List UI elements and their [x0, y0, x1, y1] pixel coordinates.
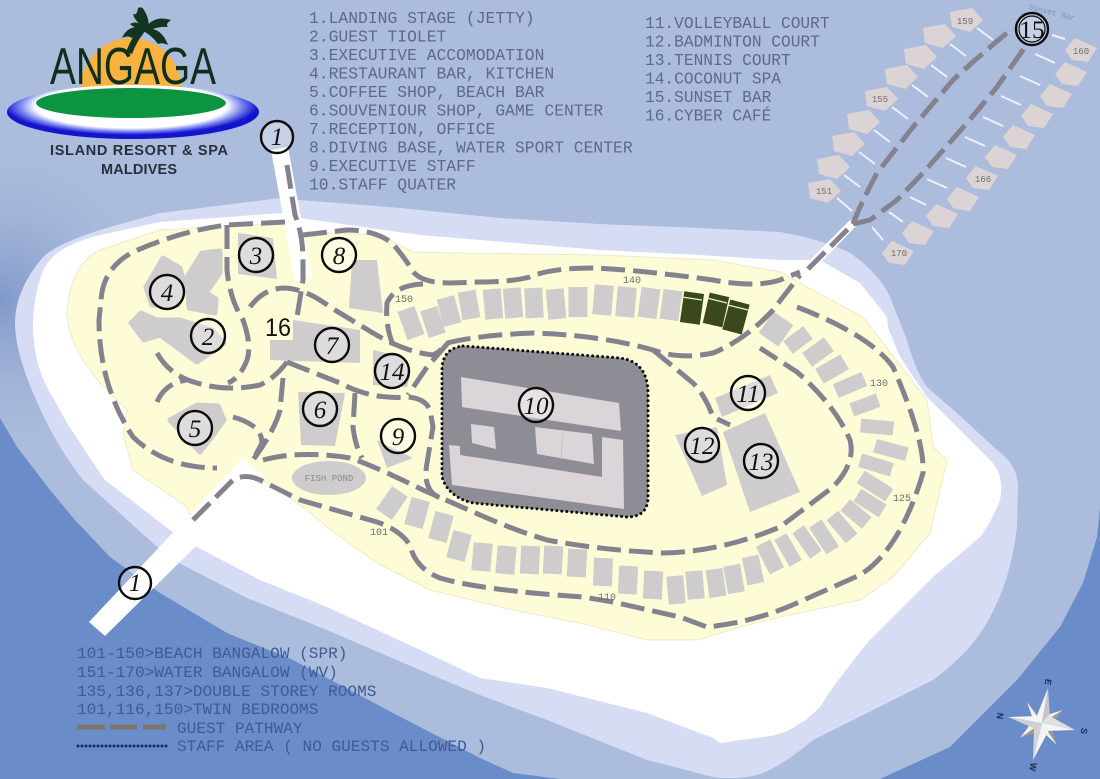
water villa numbers — [816, 17, 1089, 259]
legend: facilities 11-16 — [645, 15, 830, 126]
bangalow numbers: 125 — [893, 494, 911, 505]
volleyball court — [715, 375, 778, 417]
marker 9: 9 — [392, 424, 405, 451]
logo green island — [36, 88, 226, 118]
legend: facilities 11-16: 12.BADMINTON COURT — [645, 34, 820, 52]
marker 12: 12 — [690, 433, 714, 460]
marker 14 — [375, 354, 409, 388]
building: coffee shop — [170, 405, 224, 452]
marker 7 — [315, 328, 349, 362]
jetty to water villas — [803, 220, 856, 274]
marker 13: 13 — [748, 449, 774, 476]
bangalow numbers: 130 — [870, 379, 888, 390]
beach bangalows south row — [376, 486, 764, 605]
legend: facilities 11-16: 11.VOLLEYBALL COURT — [645, 15, 830, 33]
marker 12 — [685, 428, 719, 462]
water villa numbers: 160 — [1073, 47, 1089, 57]
legend: facilities 11-16: 14.COCONUT SPA — [645, 70, 781, 88]
legend: room types and line keys: 101-150>BEACH BANGALOW (SPR) — [77, 645, 347, 663]
marker 3 — [239, 238, 273, 272]
fish pond: FISH POND — [305, 474, 353, 484]
legend: facilities 1-10: 1.LANDING STAGE (JETTY) — [309, 9, 535, 28]
marker 11: 11 — [736, 381, 760, 408]
legend: room types and line keys: GUEST PATHWAY — [177, 720, 303, 738]
deep water lower right — [880, 507, 1100, 779]
legend: facilities 1-10 — [309, 9, 633, 194]
legend: facilities 1-10: 7.RECEPTION, OFFICE — [309, 120, 495, 139]
tennis court — [723, 413, 800, 512]
marker 8: 8 — [333, 243, 346, 270]
legend: facilities 1-10: 9.EXECUTIVE STAFF — [309, 157, 476, 176]
building: executive staff — [377, 440, 413, 468]
marker 15: 15 — [1020, 17, 1044, 44]
building: coconut spa — [373, 350, 410, 387]
building: reception and cyber cafe — [270, 320, 360, 363]
left shaded water — [0, 130, 170, 470]
water villa numbers: 170 — [891, 249, 907, 259]
marker 1 north: 1 — [271, 124, 283, 151]
legend: facilities 1-10: 2.GUEST TIOLET — [309, 28, 447, 46]
building: guest toilet — [131, 313, 224, 362]
compass rose — [995, 678, 1089, 773]
marker 2 — [191, 319, 225, 353]
logo location: MALDIVES — [101, 162, 177, 178]
sunset bar faint label: Sunset Bar — [1027, 3, 1076, 24]
bangalow numbers — [370, 276, 911, 604]
compass rose: E — [1043, 678, 1053, 686]
marker 5: 5 — [189, 416, 201, 443]
marker 13 — [744, 444, 778, 478]
water villa numbers: 155 — [872, 95, 888, 105]
white beach — [33, 213, 1001, 743]
legend: facilities 11-16: 13.TENNIS COURT — [645, 52, 791, 70]
legend: facilities 1-10: 5.COFFEE SHOP, BEACH BAR — [309, 83, 545, 102]
logo tagline: ISLAND RESORT & SPA — [50, 143, 229, 159]
jetty north — [271, 147, 312, 281]
marker 4 — [150, 275, 184, 309]
marker 3: 3 — [249, 243, 262, 270]
beach bangalows east row — [756, 311, 909, 574]
guest pathways — [99, 28, 1025, 627]
deep water lower left — [0, 418, 560, 779]
bangalow numbers: 110 — [598, 593, 616, 604]
logo — [7, 7, 259, 178]
marker 5 — [178, 411, 212, 445]
jetty south — [89, 458, 265, 636]
water villas 160-170 — [882, 38, 1097, 265]
building: restaurant right wing — [187, 251, 220, 313]
legend: room types and line keys — [77, 645, 486, 756]
lagoon ring — [15, 198, 1018, 778]
marker 6: 6 — [314, 397, 327, 424]
marker 6 — [303, 392, 337, 426]
marker 10: 10 — [524, 393, 549, 420]
island land — [67, 223, 947, 640]
marker 2: 2 — [202, 324, 214, 351]
water villa numbers: 159 — [957, 17, 973, 27]
fish pond — [292, 461, 366, 495]
marker 4: 4 — [161, 280, 173, 307]
legend: facilities 11-16: 15.SUNSET BAR — [645, 89, 772, 107]
legend: facilities 1-10: 8.DIVING BASE, WATER SPORT CENTER — [309, 138, 633, 158]
water villa numbers: 166 — [975, 175, 991, 185]
badminton court — [675, 427, 727, 496]
beach bangalows north row — [397, 284, 682, 340]
compass rose: W — [1027, 762, 1039, 773]
legend: room types and line keys: 151-170>WATER BANGALOW (WV) — [77, 664, 338, 682]
bangalow numbers: 150 — [395, 295, 413, 306]
bangalow numbers: 101 — [370, 528, 388, 539]
water villas 151-159 — [808, 8, 983, 203]
building: souvenir shop — [298, 392, 345, 446]
building: diving base — [349, 260, 383, 313]
marker 1 north — [261, 121, 293, 153]
staff area — [442, 346, 648, 517]
double storey rooms 135-137 — [680, 291, 750, 335]
legend: room types and line keys: 101,116,150>TWIN BEDROOMS — [77, 701, 318, 719]
legend: room types and line keys: 135,136,137>DOUBLE STOREY ROOMS — [77, 683, 376, 701]
water villas connectors — [837, 28, 1065, 240]
building: executive accommodation — [238, 233, 277, 279]
marker 10 — [519, 388, 553, 422]
marker 11 — [731, 376, 765, 410]
marker 9 — [381, 419, 415, 453]
legend: room types and line keys: STAFF AREA ( NO GUESTS ALLOWED ) — [177, 738, 486, 756]
logo palm tree — [122, 7, 171, 54]
building: restaurant left wing — [146, 258, 185, 305]
logo sun — [81, 38, 181, 88]
marker 1 south — [119, 567, 151, 599]
logo name: ANGAGA — [50, 38, 216, 96]
compass rose: S — [1079, 727, 1089, 735]
marker 8 — [322, 238, 356, 272]
bangalow numbers: 140 — [623, 276, 641, 287]
legend: facilities 1-10: 6.SOUVENIOUR SHOP, GAME CENTER — [309, 102, 603, 120]
legend: facilities 11-16: 16.CYBER CAFÉ — [645, 106, 771, 126]
marker 15 — [1016, 13, 1048, 45]
legend: facilities 1-10: 4.RESTAURANT BAR, KITCHEN — [309, 64, 554, 84]
marker 1 south: 1 — [129, 570, 141, 597]
marker 7: 7 — [326, 333, 340, 360]
label 16 cyber cafe: 16 — [265, 314, 291, 342]
compass rose: N — [995, 712, 1005, 720]
legend: facilities 1-10: 3.EXECUTIVE ACCOMODATION — [309, 46, 544, 65]
legend: facilities 1-10: 10.STAFF QUATER — [309, 176, 456, 194]
water villa numbers: 151 — [816, 187, 832, 197]
logo island ellipse — [7, 85, 259, 139]
marker 14: 14 — [380, 359, 404, 386]
